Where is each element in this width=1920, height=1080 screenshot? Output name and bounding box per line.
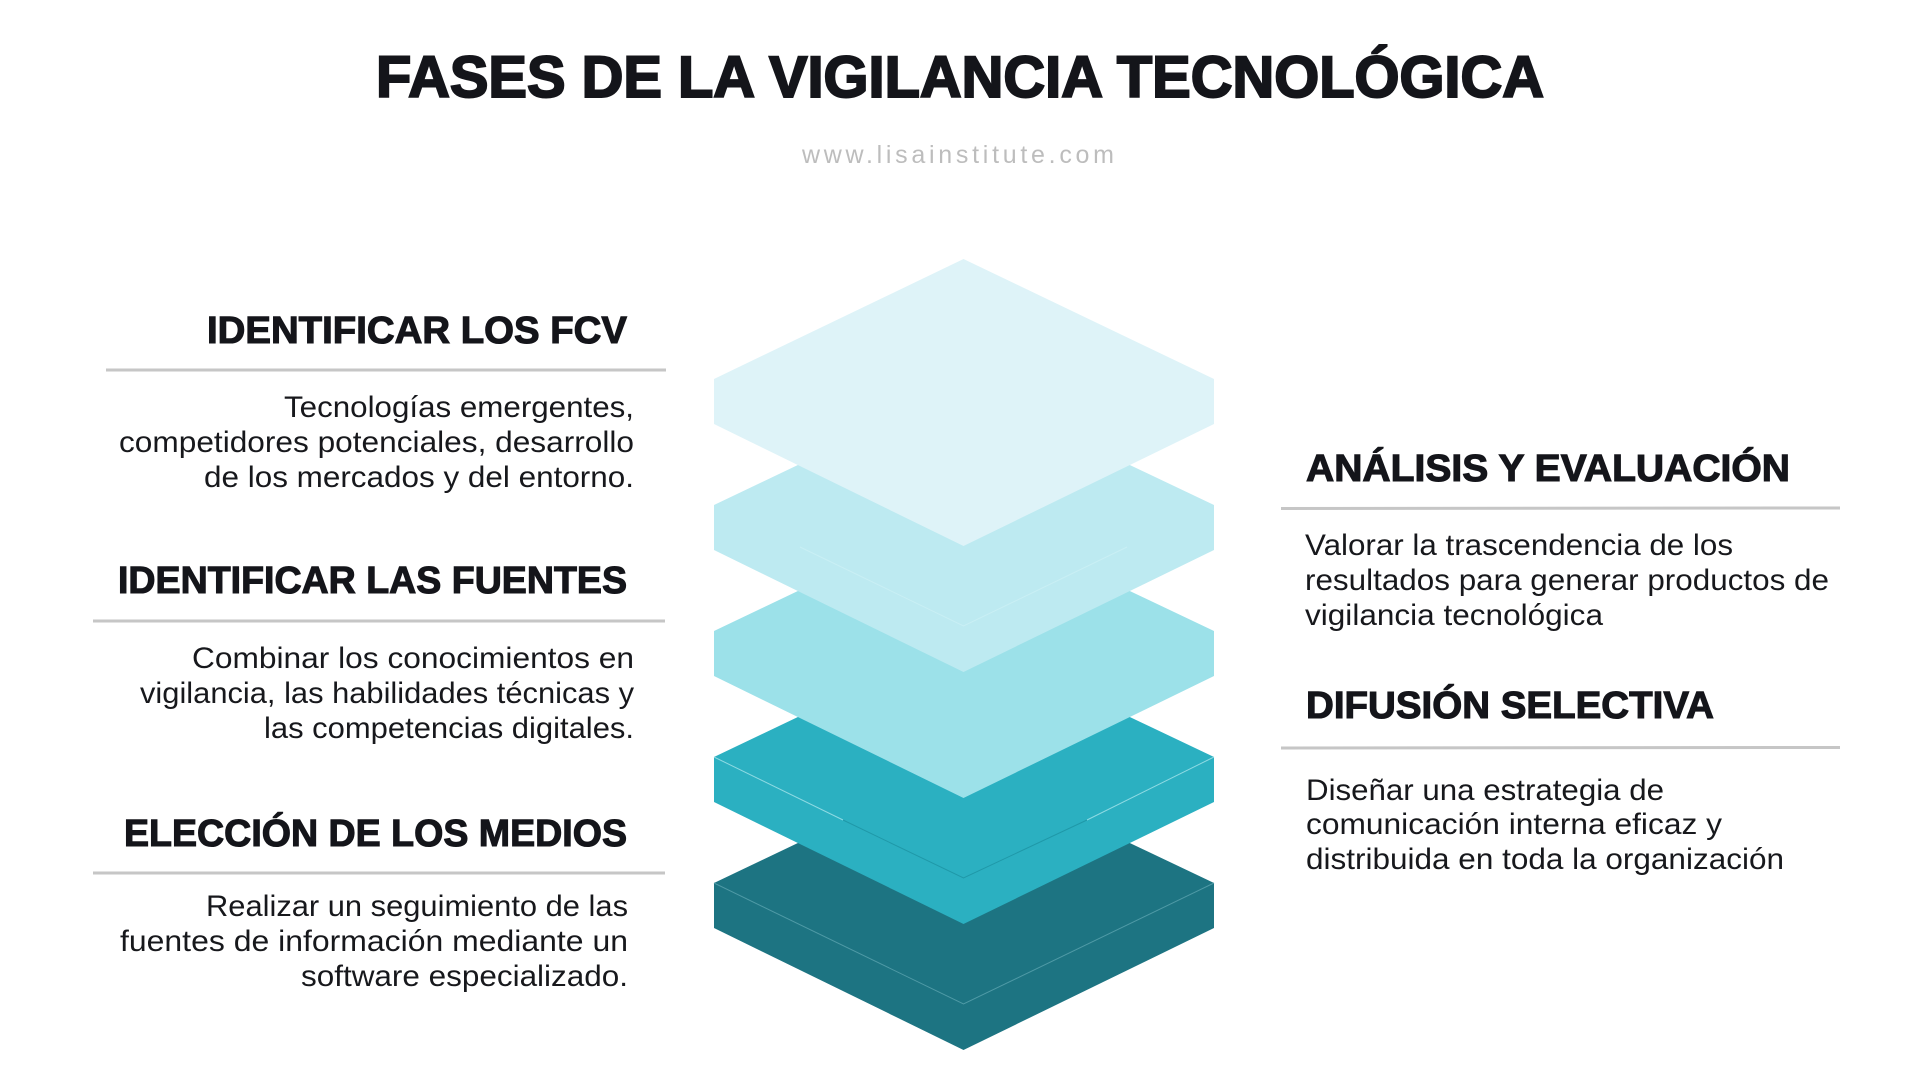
heading: IDENTIFICAR LOS FCV <box>207 310 628 352</box>
layer 1: palest aqua <box>714 259 1214 546</box>
block: elección de los medios <box>93 811 665 993</box>
layered stack diagram <box>714 259 1214 1050</box>
description: Tecnologías emergentes, <box>284 391 634 424</box>
description <box>119 391 634 494</box>
heading: ELECCIÓN DE LOS MEDIOS <box>124 811 627 855</box>
title: FASES DE LA VIGILANCIA TECNOLÓGICA <box>376 45 1544 110</box>
block: análisis y evaluación <box>1281 446 1840 632</box>
description <box>120 890 628 993</box>
description: las competencias digitales. <box>264 712 634 745</box>
block: identificar las fuentes <box>93 560 665 745</box>
description: Realizar un seguimiento de las <box>206 890 628 923</box>
description: Combinar los conocimientos en <box>192 642 634 675</box>
description: competidores potenciales, desarrollo <box>119 426 634 459</box>
description: software especializado. <box>301 960 628 993</box>
description: comunicación interna eficaz y <box>1306 808 1722 841</box>
description: vigilancia, las habilidades técnicas y <box>140 677 634 710</box>
layer 3: light aqua <box>714 512 1214 798</box>
description: Valorar la trascendencia de los <box>1305 529 1733 562</box>
description <box>1305 529 1829 632</box>
heading: ANÁLISIS Y EVALUACIÓN <box>1306 446 1790 490</box>
block: difusión selectiva <box>1281 683 1840 876</box>
description: vigilancia tecnológica <box>1305 599 1603 632</box>
description <box>1306 774 1784 876</box>
description: fuentes de información mediante un <box>120 925 628 958</box>
layer 2: pale aqua <box>714 386 1214 672</box>
description: de los mercados y del entorno. <box>204 461 634 494</box>
description <box>140 642 634 745</box>
layer 5: dark teal <box>714 764 1214 1050</box>
heading: IDENTIFICAR LAS FUENTES <box>118 560 627 602</box>
description: resultados para generar productos de <box>1305 564 1829 597</box>
description: Diseñar una estrategia de <box>1306 774 1664 807</box>
website url: www.lisainstitute.com <box>801 141 1114 169</box>
description: distribuida en toda la organización <box>1306 843 1784 876</box>
layer 4: teal <box>714 638 1214 924</box>
heading: DIFUSIÓN SELECTIVA <box>1306 683 1714 727</box>
block: identificar los FCV <box>106 310 666 494</box>
